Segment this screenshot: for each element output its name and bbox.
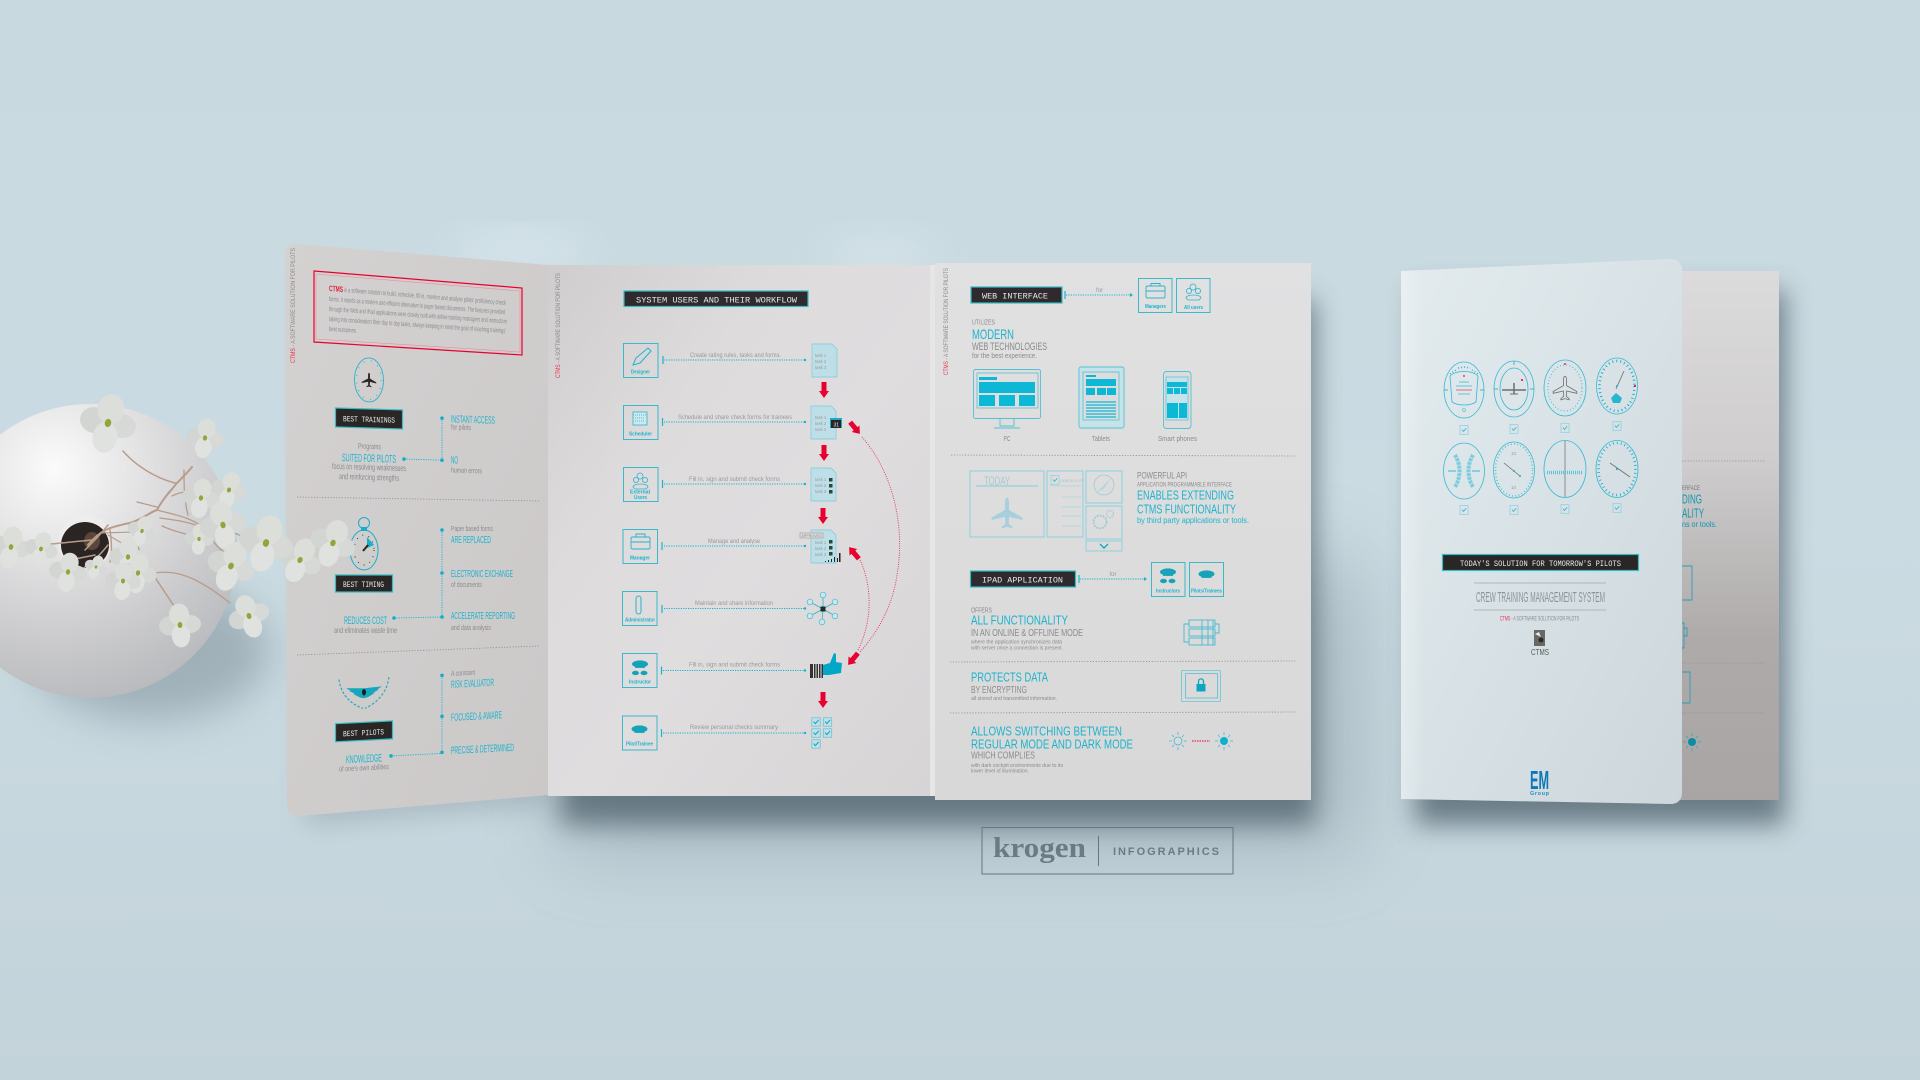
heading: web interface: [971, 287, 1062, 303]
panel: left page: ACCELERATE REPORTING: [451, 610, 515, 622]
icon: task document: [812, 344, 837, 377]
text: programs suited for pilots: focus on resolving weaknesses: [332, 461, 406, 473]
text: all functionality: ALL FUNCTIONALITY: [971, 612, 1068, 628]
icon: scheduled document: [811, 406, 842, 439]
text: pilot task: Review personal checks summary: [690, 724, 779, 731]
row: instructor: [622, 653, 842, 688]
label: best pilots: BEST PILOTS: [343, 728, 384, 739]
icon: smart phone: Smart phones: [1158, 436, 1197, 443]
panel: left page: ELECTRONIC EXCHANGE: [451, 568, 513, 580]
icon: completed document: [811, 468, 836, 501]
text: timing benefits: of documents: [451, 580, 482, 589]
icon: administrator: [622, 592, 657, 626]
panel: left page: [285, 244, 548, 816]
icon: light and dark mode suns: [1169, 732, 1233, 750]
icon: approved document with chart: task 1: [815, 540, 827, 545]
checkboxes row 1: [1460, 422, 1621, 434]
text: dark mode: [970, 724, 1133, 774]
text: benefits: NO: [451, 454, 458, 467]
icon: altitude gauge: [1596, 440, 1638, 498]
connector: for managers and users: for: [1096, 287, 1104, 294]
icon: heading gauge: [1544, 360, 1586, 416]
icon: instructor: Instructor: [629, 680, 652, 686]
callout: CTMS intro box: best outcomes.: [329, 326, 357, 335]
icon: servers: [1184, 620, 1219, 645]
icon: PC: PC: [1004, 436, 1010, 443]
text: protects data: all stored and transmitted information.: [971, 696, 1057, 702]
text: instructor task: Fill in, sign and submit check forms: [689, 662, 780, 668]
text: benefits: [451, 413, 495, 476]
icon: scheduler: Scheduler: [629, 432, 653, 438]
icon: approved document with chart: [800, 530, 840, 563]
panel: today flight: TODAY: [984, 474, 1010, 488]
icon: smart phone: [1158, 372, 1197, 443]
text: pilot qualities: [451, 666, 514, 757]
panel: closed booklet back page: [1640, 271, 1779, 800]
icon: clock gauge: 10: [1511, 451, 1517, 456]
title: crew training management system: [1474, 583, 1606, 610]
connector lines: [389, 674, 444, 758]
text: reduces cost: REDUCES COST: [344, 615, 387, 627]
text: benefits: human errors: [451, 465, 482, 475]
icon: PC: [974, 370, 1040, 443]
section: API interface mock: [970, 471, 1122, 551]
text: all functionality: with server once a connection is present.: [970, 646, 1063, 652]
label: best trainings: [336, 408, 402, 429]
text: programs suited for pilots: Programs: [358, 442, 381, 451]
text: timing benefits: and data analysis: [451, 623, 491, 632]
row: scheduler: [624, 406, 842, 440]
spine label middle page: CTMS - A SOFTWARE SOLUTION FOR PILOTS: [555, 273, 562, 378]
icon: scheduled document: task 1: [815, 415, 827, 420]
text: dark mode: WHICH COMPLIES: [971, 750, 1035, 762]
icon: pilots trainees: [1190, 562, 1224, 596]
icon: airspeed gauge: [1596, 358, 1638, 414]
icon: tablet: Tablets: [1092, 436, 1110, 443]
text: modern web technologies: for the best experience.: [972, 353, 1037, 360]
label: best timing: [336, 575, 392, 592]
text: all functionality: IN AN ONLINE & OFFLINE MODE: [971, 628, 1083, 639]
booklet inside spread: [285, 244, 1779, 816]
workflow line: [662, 729, 806, 737]
text: powerful API: APPLICATION PROGRAMMABLE INTERFACE: [1137, 482, 1232, 488]
icon: completed document: task 3: [815, 489, 827, 494]
connector lines: [392, 528, 444, 620]
icon: clock gauge: 10: [1511, 485, 1517, 490]
callout: CTMS intro box: forms. It stands as a modern and efficient alternative to paper based documents. The features provided: [329, 296, 505, 316]
icon: plane gauge: [354, 358, 384, 402]
callout: CTMS intro box: through the Web and iPad applications were closely built with airline training managers and instructors: [329, 306, 507, 325]
icon: completed document: task 1: [815, 477, 827, 482]
text: powerful API: CTMS FUNCTIONALITY: [1137, 502, 1236, 516]
text: peeking page text: ALITY: [1682, 506, 1704, 520]
text: knowledge: [339, 752, 389, 774]
text: external users task: Fill in, sign and submit check forms: [689, 476, 780, 483]
icon: task document: task 2: [815, 359, 827, 364]
panel: more chevron: [1086, 541, 1122, 551]
connector: for instructors and trainees: [1079, 571, 1147, 583]
row: designer: [624, 344, 837, 378]
watermark: krogen infographics: [982, 828, 1233, 874]
arrow: down 1: [819, 382, 829, 398]
label: best trainings: BEST TRAININGS: [343, 415, 395, 426]
text: pilot qualities: A constant: [451, 668, 476, 678]
icon: scheduled document: task 3: [815, 427, 827, 432]
panel: closed booklet cover: CREW TRAINING MANAGEMENT SYSTEM: [1476, 589, 1605, 606]
text: manager task: Manage and analyse: [708, 538, 760, 545]
arrow: down 2: [819, 445, 829, 461]
spine label left page: CTMS - A SOFTWARE SOLUTION FOR PILOTS: [290, 247, 297, 363]
flowers: [0, 389, 363, 649]
row: external users: [624, 468, 836, 502]
icon: pilot trainee: [622, 716, 657, 750]
connector: for managers and users: [1065, 287, 1133, 299]
callout: CTMS intro box: taking into consideration their day to day tasks, always keeping in mind the goal of reaching trainings': [329, 316, 506, 335]
panel: check list: [1047, 471, 1084, 537]
label: best timing: BEST TIMING: [343, 581, 384, 590]
text: all functionality: [970, 608, 1083, 652]
workflow line: [662, 542, 806, 550]
page shadows: [30, 290, 1785, 850]
text: protects data: PROTECTS DATA: [971, 670, 1048, 684]
workflow line: [663, 356, 806, 364]
icon: external users: Users: [634, 495, 647, 501]
row: administrator: [622, 592, 838, 626]
text: all functionality: where the application synchronizes data: [970, 640, 1063, 646]
arrow: down 4: [818, 692, 828, 708]
text: pilot qualities: RISK EVALUATOR: [451, 677, 494, 691]
text: dark mode: REGULAR MODE AND DARK MODE: [971, 736, 1133, 752]
panel: compass: [1086, 471, 1122, 503]
icon: all users: [1176, 278, 1210, 312]
text: benefits: for pilots: [451, 422, 471, 432]
watermark: krogen infographics: INFOGRAPHICS: [1113, 846, 1219, 858]
checkboxes row 2: [1460, 504, 1621, 514]
text: pilot qualities: FOCUSED & AWARE: [451, 709, 502, 724]
callout: CTMS intro box: CTMS: [329, 284, 343, 294]
watermark: krogen infographics: krogen: [993, 833, 1086, 864]
icon: designer: [624, 344, 658, 378]
spine label right page: CTMS - A SOFTWARE SOLUTION FOR PILOTS: [943, 268, 950, 375]
section: best trainings: [332, 357, 495, 486]
icon: instructors: Instructors: [1156, 588, 1180, 594]
logo: EM Group: [1530, 765, 1550, 797]
callout: CTMS intro box: [314, 271, 522, 355]
text: peeking page text: DING: [1682, 492, 1702, 506]
icon: designer: Designer: [631, 370, 651, 376]
icon: peeking shapes: [1680, 566, 1692, 703]
text: peeking page text: ns or tools.: [1682, 520, 1717, 529]
icon: CTMS app: CTMS: [1531, 647, 1549, 657]
text: administrator task: Maintain and share information: [695, 600, 773, 607]
text: powerful API: [1137, 470, 1249, 525]
icon: manager: [623, 530, 658, 564]
text: timing benefits: [451, 524, 515, 632]
row: manager: [623, 530, 840, 564]
panel: middle page workflow: [548, 265, 935, 796]
text: programs suited for pilots: SUITED FOR PILOTS: [342, 452, 396, 466]
connector: for instructors and trainees: for: [1110, 571, 1117, 578]
icon: pilot trainee: Pilot/Trainee: [626, 742, 653, 748]
text: modern web technologies: WEB TECHNOLOGIES: [972, 341, 1047, 353]
text: programs suited for pilots: and reinforcing strengths: [339, 471, 399, 483]
text: reduces cost: [334, 615, 397, 635]
text: all functionality: OFFERS: [971, 608, 992, 614]
branches: [25, 451, 312, 612]
arrow: down 3: [818, 508, 828, 524]
icon: approved document with chart: task 2: [815, 546, 827, 551]
icon: approved document with chart: task 3: [815, 552, 827, 557]
workflow line: [662, 418, 806, 426]
text: programs suited for pilots: [332, 441, 406, 483]
subtitle: CTMS - A SOFTWARE SOLUTION FOR PILOTS: [1500, 616, 1579, 622]
icon: task document: task 3: [815, 365, 827, 370]
workflow line: [662, 605, 806, 613]
text: peeking page text: [1682, 485, 1717, 529]
icon: trim gauge: [1444, 443, 1484, 499]
text: scheduler task: Schedule and share check forms for trainees: [678, 414, 792, 421]
connector lines: [402, 415, 444, 462]
icon: scheduled document: task 2: [815, 421, 827, 426]
heading: system users and their workflow: SYSTEM USERS AND THEIR WORKFLOW: [636, 296, 798, 306]
text: dark mode: lower level of illumination.: [971, 768, 1029, 774]
text: timing benefits: ARE REPLACED: [451, 534, 491, 546]
flowering branch: [0, 389, 363, 649]
icon: tablet lock: [1182, 670, 1220, 702]
icon: scheduled document: 31: [834, 422, 839, 428]
logo: EM Group: EM: [1530, 765, 1549, 795]
heading: today's solution: [1442, 554, 1638, 570]
text: reduces cost: and eliminates waste time: [334, 626, 397, 635]
text: modern web technologies: [972, 320, 1047, 360]
panel: left page: INSTANT ACCESS: [451, 413, 495, 427]
panel: left page: PRECISE & DETERMINED: [451, 742, 514, 757]
logo: EM Group: Group: [1530, 791, 1550, 797]
text: timing benefits: Paper based forms: [451, 524, 493, 533]
icon: scale gauge: [1544, 440, 1586, 498]
icon: task document: task 1: [815, 353, 827, 358]
icon: all users: All users: [1184, 305, 1203, 311]
panel: closed booklet cover: [1401, 259, 1682, 804]
heading: ipad application: [970, 571, 1076, 587]
icon: flight director gauge: [1494, 361, 1534, 417]
icon: shared network: [807, 592, 838, 625]
panel: today flight: [970, 471, 1044, 537]
text: protects data: BY ENCRYPTING: [971, 685, 1027, 696]
workflow line: [662, 666, 806, 674]
icon: administrator: Administrator: [625, 618, 656, 624]
callout: CTMS intro box: is a software solution to build, schedule, fill in, monitor and analyse pilots' proficiency check: [344, 287, 506, 307]
background light glow: [450, 232, 940, 269]
text: peeking page text: ERFACE: [1682, 485, 1700, 492]
icon: managers: [1138, 278, 1172, 312]
text: dark mode: with dark cockpit environments due to its: [970, 763, 1063, 769]
panel: settings: [1086, 506, 1122, 539]
heading: web interface: WEB INTERFACE: [982, 292, 1048, 302]
heading: system users and their workflow: [624, 291, 808, 306]
arrows: feedback loops: [844, 419, 900, 668]
icon: manager: Manager: [630, 556, 651, 562]
icon: pilot wings: [339, 677, 389, 710]
text: knowledge: of one's own abilities: [339, 762, 389, 774]
text: protects data: [971, 670, 1057, 702]
text: knowledge: KNOWLEDGE: [346, 752, 382, 766]
section: best pilots: [336, 666, 514, 774]
icon: thumbs up: [810, 653, 842, 678]
icon: approved document with chart: APPROVED: [802, 533, 822, 538]
workflow line: [662, 480, 806, 488]
icon: managers: Managers: [1145, 304, 1166, 310]
icon: peeking sun: [1683, 733, 1701, 751]
icon: scheduler: [624, 406, 658, 440]
icon: CTMS app: [1531, 630, 1549, 657]
icon: completed document: task 2: [815, 483, 827, 488]
row: pilot trainee: [622, 716, 832, 750]
panel: check list: CHECK LIST: [1060, 478, 1084, 483]
text: modern web technologies: UTILIZES: [972, 320, 995, 326]
icon: pilots trainees: Pilots/Trainees: [1191, 588, 1222, 594]
icon: checklist: [812, 718, 832, 748]
icon: external users: External: [630, 490, 651, 496]
icon: clock gauge: [1494, 442, 1534, 498]
heading: today's solution: TODAY'S SOLUTION FOR TOMORROW'S PILOTS: [1460, 559, 1621, 569]
icon: external users: [624, 468, 658, 502]
text: powerful API: by third party applications or tools.: [1137, 516, 1249, 525]
icon: instructor: [622, 654, 657, 688]
text: designer task: Create rating rules, tasks and forms.: [690, 352, 781, 359]
heading: ipad application: IPAD APPLICATION: [982, 576, 1063, 586]
section: best timing: [334, 518, 515, 635]
icon: tablet: [1079, 367, 1124, 443]
text: powerful API: POWERFUL API: [1137, 470, 1187, 482]
label: best pilots: [336, 721, 392, 742]
text: modern web technologies: MODERN: [972, 326, 1014, 342]
vase: [0, 404, 237, 698]
icon: attitude gauge: [1444, 362, 1484, 418]
text: dark mode: ALLOWS SWITCHING BETWEEN: [971, 724, 1122, 738]
panel: right page: [935, 263, 1311, 800]
icon: stopwatch: [350, 518, 378, 570]
text: powerful API: ENABLES EXTENDING: [1137, 488, 1234, 502]
icon: instructors: [1152, 562, 1185, 596]
